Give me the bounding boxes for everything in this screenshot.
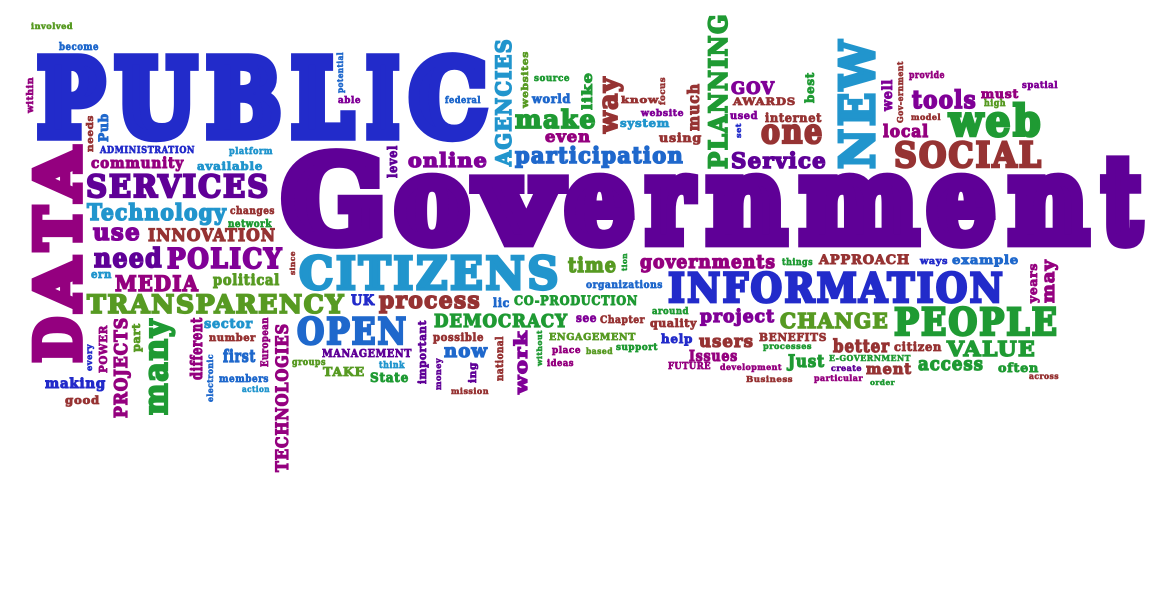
word: world: world: [531, 92, 571, 106]
word: every: every: [84, 344, 94, 371]
word: available: available: [197, 159, 263, 173]
word: users: users: [699, 332, 754, 352]
word: websites: websites: [520, 51, 531, 109]
word: MANAGEMENT: MANAGEMENT: [322, 347, 412, 360]
word: INNOVATION: INNOVATION: [148, 226, 276, 246]
word: SERVICES: SERVICES: [86, 169, 270, 205]
word: website: website: [640, 109, 684, 119]
word: way: way: [594, 76, 624, 134]
word: Service: Service: [731, 149, 827, 174]
word: Government: e: [566, 133, 634, 269]
word: sector: sector: [204, 317, 253, 332]
word: better: better: [833, 336, 890, 357]
word: around: around: [652, 306, 689, 317]
word: Government: n: [1010, 133, 1088, 269]
word: support: support: [616, 342, 658, 353]
word: members: members: [219, 374, 269, 385]
word: may: may: [1038, 259, 1059, 303]
word: need: need: [94, 244, 163, 274]
word: since: since: [288, 251, 297, 275]
word: level: level: [386, 145, 401, 178]
word: CITIZENS: CITIZENS: [299, 247, 561, 300]
word: important: important: [415, 320, 429, 384]
word: number: number: [209, 332, 256, 344]
word: different: different: [187, 317, 206, 380]
word: think: think: [379, 361, 405, 371]
word: local: local: [883, 122, 929, 142]
word: Technology: Technology: [87, 200, 227, 226]
word: best: best: [803, 72, 817, 103]
word: order: order: [870, 378, 896, 387]
word: PUBLIC: C: [410, 37, 487, 160]
word: PUBLIC: B: [207, 37, 281, 160]
word: Government: t: [1102, 133, 1141, 269]
word: participation: participation: [515, 143, 684, 169]
word: TRANSPARENCY: TRANSPARENCY: [87, 290, 345, 319]
word: tools: tools: [912, 85, 977, 114]
word: must: must: [981, 86, 1019, 101]
word: DATA: D: [24, 317, 95, 362]
word: example: example: [952, 252, 1019, 267]
word: web: web: [948, 97, 1043, 147]
word: using: using: [659, 131, 702, 145]
word: AWARDS: AWARDS: [732, 96, 796, 108]
word: things: things: [782, 258, 813, 268]
word: source: source: [534, 74, 570, 84]
word: APPROACH: APPROACH: [818, 253, 910, 268]
word: MEDIA: MEDIA: [115, 272, 199, 297]
word: Government: G: [282, 133, 386, 269]
word: Business: Business: [746, 375, 793, 385]
word: set: set: [734, 123, 743, 138]
word: online: online: [408, 149, 488, 172]
word: changes: changes: [230, 206, 275, 217]
word: place: place: [552, 346, 581, 356]
word: organizations: organizations: [586, 280, 663, 291]
word: State: State: [370, 371, 409, 386]
word: become: become: [59, 42, 99, 53]
word: possible: possible: [433, 331, 484, 344]
word: needs: needs: [85, 115, 96, 152]
word: ways: ways: [919, 256, 948, 267]
word: well: well: [880, 79, 896, 112]
word: FUTURE: FUTURE: [668, 362, 711, 372]
word: DATA: A: [24, 147, 95, 201]
word: Just: Just: [786, 352, 825, 372]
word: see: see: [576, 311, 597, 325]
word: much: much: [684, 83, 703, 131]
word: tion: tion: [620, 253, 629, 271]
word: AGENCIES: AGENCIES: [492, 38, 517, 167]
word: ideas: ideas: [547, 358, 574, 369]
word: PEOPLE: PEOPLE: [894, 300, 1059, 344]
word: NEW: NEW: [830, 38, 886, 169]
word: often: often: [998, 360, 1039, 375]
word: make: make: [515, 105, 597, 134]
word: like: like: [580, 72, 596, 110]
word: TAKE: TAKE: [323, 365, 365, 379]
word: ern: ern: [91, 267, 112, 281]
word: DATA: T: [24, 207, 95, 250]
word: PUBLIC: I: [367, 37, 399, 160]
word: based: based: [586, 346, 613, 356]
word: Gov-ernment: Gov-ernment: [896, 61, 906, 123]
word: E-GOVERNMENT: E-GOVERNMENT: [829, 353, 911, 363]
word: create: create: [831, 363, 862, 373]
word: governments: governments: [640, 251, 776, 273]
word: VALUE: VALUE: [946, 337, 1036, 361]
word: part: part: [129, 323, 143, 352]
word: European: European: [260, 317, 271, 367]
word: UK: UK: [351, 293, 375, 309]
word: quality: quality: [650, 316, 697, 330]
word: many: many: [136, 318, 175, 415]
word: community: community: [91, 154, 184, 172]
word: OPEN: OPEN: [297, 311, 408, 353]
word: focus: focus: [657, 77, 667, 105]
word: Pub: Pub: [97, 113, 112, 142]
word: making: making: [45, 376, 106, 392]
word: Government: o: [396, 133, 468, 269]
word: SOCIAL: SOCIAL: [894, 136, 1043, 176]
word: electronic: electronic: [205, 354, 215, 402]
word: provide: provide: [909, 71, 945, 81]
word: TECHNOLOGIES: TECHNOLOGIES: [273, 323, 293, 472]
word: across: across: [1029, 371, 1059, 381]
word: PUBLIC: P: [38, 37, 104, 160]
word: access: access: [918, 353, 984, 375]
word: DATA: A: [24, 257, 95, 311]
word: PUBLIC: U: [116, 37, 196, 160]
word: POLICY: POLICY: [167, 244, 283, 275]
word: network: network: [228, 219, 272, 230]
word: time: time: [568, 253, 617, 277]
word: Issues: Issues: [689, 347, 738, 365]
word: DEMOCRACY: DEMOCRACY: [434, 311, 568, 332]
word: platform: platform: [229, 146, 273, 157]
word: Government: n: [708, 133, 786, 269]
word: system: system: [620, 117, 670, 130]
word: within: within: [25, 77, 36, 114]
word: ENGAGEMENT: ENGAGEMENT: [549, 332, 636, 343]
word: work: work: [511, 330, 532, 395]
word: years: years: [1026, 263, 1040, 304]
word: processes: processes: [763, 342, 812, 352]
word: involved: involved: [31, 22, 73, 32]
word: Government: e: [928, 133, 994, 269]
word: Government: v: [475, 133, 562, 269]
word: federal: federal: [445, 96, 481, 106]
word: process: process: [379, 287, 481, 314]
word: use: use: [93, 219, 141, 246]
word: ADMINISTRATION: ADMINISTRATION: [99, 145, 195, 156]
word: development: development: [720, 363, 782, 373]
word: one: one: [761, 112, 824, 151]
word: POWER: POWER: [96, 325, 110, 373]
word: money: money: [433, 358, 443, 390]
word: know: know: [621, 95, 659, 106]
word: now: now: [444, 340, 488, 362]
word: lic: lic: [493, 296, 510, 310]
word: project: project: [700, 306, 775, 327]
word: model: model: [911, 113, 941, 123]
word: able: able: [338, 96, 361, 106]
word: without: without: [535, 330, 544, 367]
word: potential: potential: [335, 52, 345, 93]
word: CO-PRODUCTION: CO-PRODUCTION: [514, 294, 638, 309]
word: internet: internet: [765, 111, 822, 125]
word: national: national: [494, 336, 506, 381]
word: action: action: [242, 385, 270, 395]
word: Chapter: Chapter: [600, 314, 645, 326]
word: used: used: [730, 111, 758, 122]
word: mission: mission: [451, 386, 489, 396]
word: first: first: [223, 347, 256, 367]
word: spatial: spatial: [1022, 81, 1058, 91]
word: even: even: [545, 127, 591, 146]
word: CHANGE: CHANGE: [780, 309, 889, 333]
word: ment: ment: [866, 360, 912, 378]
word: BENEFITS: BENEFITS: [759, 330, 827, 344]
word: good: good: [65, 393, 100, 407]
word: PUBLIC: L: [292, 37, 353, 160]
word: Government: m: [800, 133, 918, 269]
word: high: high: [984, 99, 1006, 109]
word: political: political: [213, 271, 280, 289]
word: INFORMATION: INFORMATION: [668, 265, 1005, 312]
word: help: help: [661, 331, 693, 346]
word: ing: ing: [467, 362, 479, 383]
word: PLANNING: PLANNING: [704, 13, 733, 169]
word: PROJECTS: PROJECTS: [111, 317, 132, 418]
word: particular: particular: [814, 373, 863, 383]
word: groups: groups: [292, 358, 326, 368]
word: Government: r: [646, 133, 694, 269]
word: citizen: citizen: [894, 340, 942, 354]
word: GOV: GOV: [731, 79, 775, 99]
